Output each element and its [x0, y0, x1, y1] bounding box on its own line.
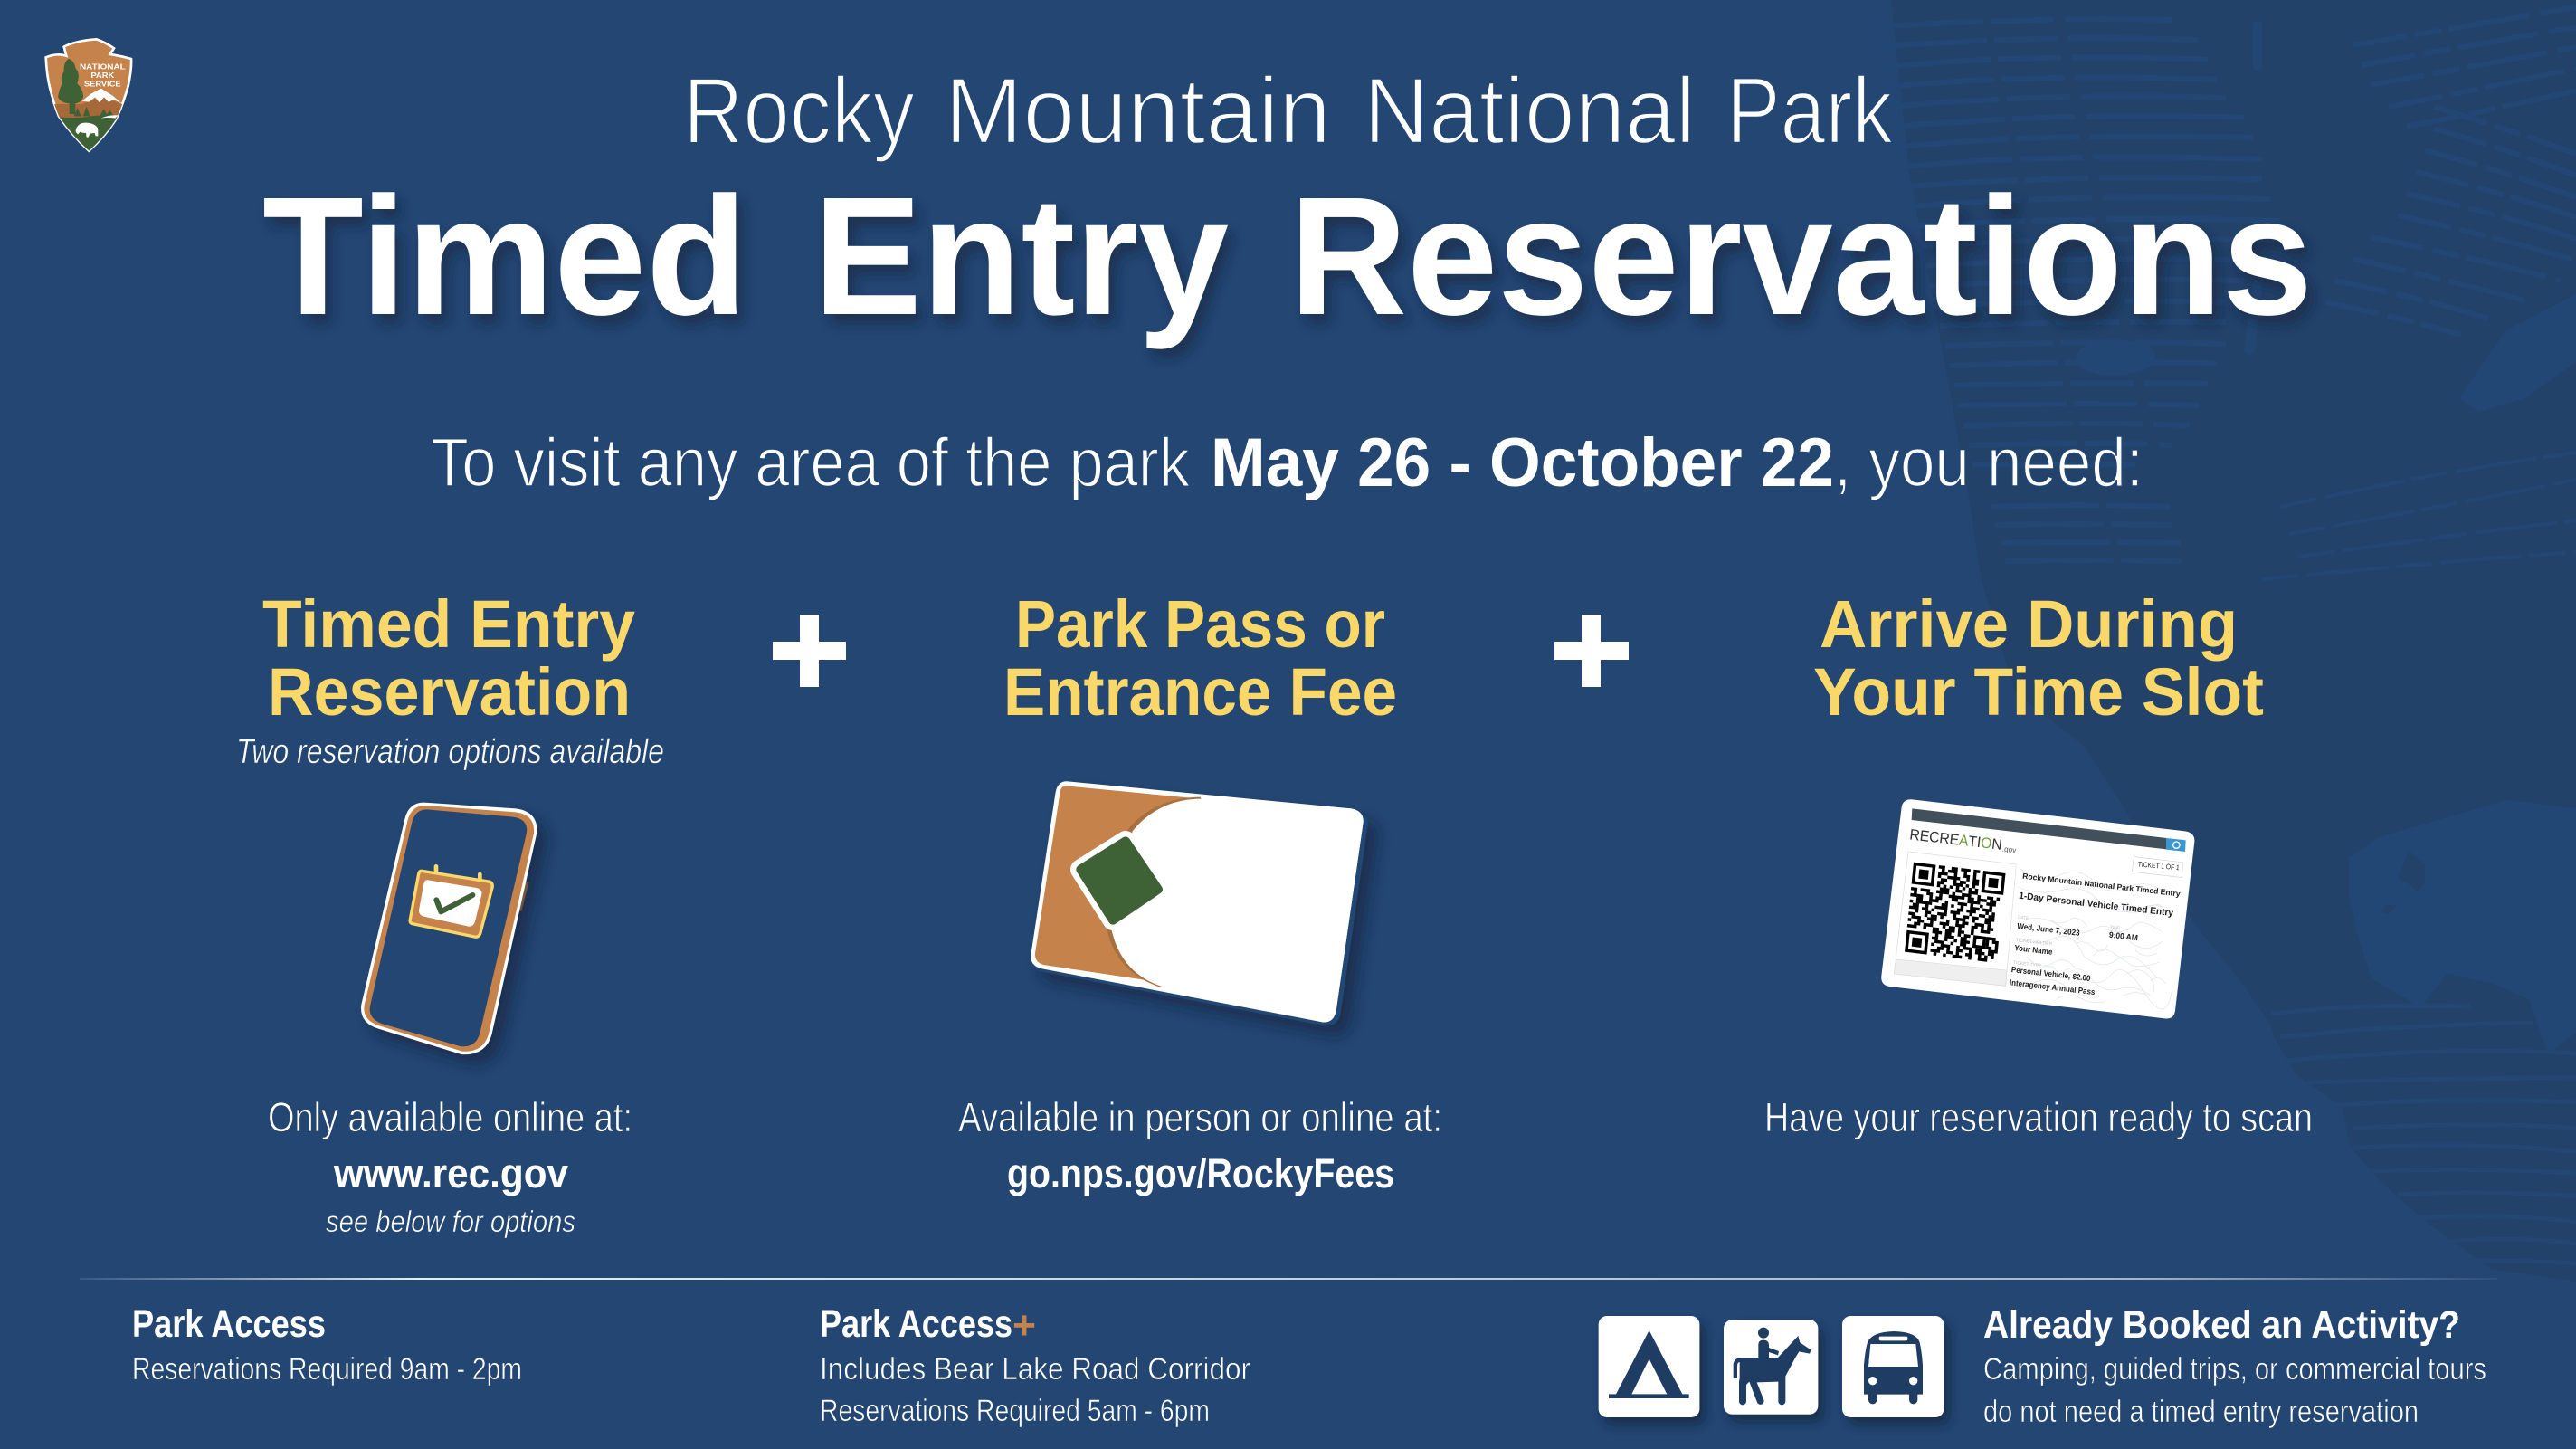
title: Timed Entry Reservations: Reservations: [1289, 163, 2313, 350]
text: two reservation options: Two reservation options available: [236, 733, 664, 771]
icon: recreation.gov ticket: Wed, June 7, 2023: [2017, 921, 2080, 938]
panel: park access plus: +: [1012, 1303, 1036, 1348]
icon: recreation.gov ticket: [1881, 799, 2194, 1018]
panel: timed entry reservation: [236, 586, 664, 1238]
panel: already booked an activity: [1983, 1303, 2486, 1429]
icon: recreation.gov ticket: TICKET TYPE: [2013, 960, 2042, 969]
text: available in person: Available in person or online at:: [958, 1094, 1442, 1140]
heading: Park Pass or Entrance Fee: Park Pass or: [1015, 586, 1385, 662]
panel: already booked an activity: Camping, guided trips, or commercial tours: [1983, 1352, 2486, 1387]
icon: recreation.gov ticket: Personal Vehicle, $2.00: [2010, 965, 2091, 983]
icon: recreation.gov ticket: TICKET HOLDER: [2015, 938, 2053, 948]
title: Timed Entry Reservations: Timed: [262, 163, 747, 350]
panel: park access: Park Access: [132, 1302, 326, 1346]
icon: recreation.gov ticket: 9:00 AM: [2108, 930, 2138, 942]
title: Timed Entry Reservations: [262, 163, 2313, 350]
logo: National Park Service arrowhead: [46, 39, 131, 157]
QR code: [1905, 863, 2005, 963]
panel: park access: Reservations Required 9am - 2pm: [132, 1352, 522, 1387]
heading: Timed Entry Reservation: Reservation: [268, 654, 631, 729]
icon: recreation.gov ticket: 1-Day Personal Vehicle Timed Entry: [2019, 891, 2174, 919]
icon: recreation.gov ticket: Rocky Mountain National Park Timed Entry: [2022, 872, 2181, 899]
panel: arrive during your time slot: [1764, 586, 2313, 1140]
panel: park access: [132, 1302, 522, 1387]
icon: phone with calendar check: [361, 803, 537, 1054]
text: have reservation ready: Have your reservation ready to scan: [1764, 1094, 2313, 1140]
icon: horseback rider: [1724, 1320, 1818, 1415]
icon: plus one: [773, 615, 846, 687]
title: Timed Entry Reservations: Entry: [813, 163, 1229, 350]
text: see below for options: see below for options: [326, 1205, 575, 1238]
heading: Timed Entry Reservation: [262, 586, 635, 729]
icon: plus two: [1554, 615, 1629, 687]
panel: park access plus: Park Access: [820, 1302, 1012, 1346]
text: only available online: Only available online at:: [268, 1094, 632, 1140]
subheading: date requirement: May 26 - October 22: [1211, 424, 1834, 501]
heading: Timed Entry Reservation: Timed Entry: [262, 586, 635, 662]
icon: recreation.gov ticket: TIME: [2109, 925, 2121, 931]
panel: park access plus: Includes Bear Lake Road Corridor: [820, 1352, 1250, 1387]
icon: bus: [1842, 1316, 1944, 1417]
panel: park pass or entrance fee: [958, 586, 1442, 1196]
heading: Arrive During Your Time Slot: Your Time Slot: [1813, 654, 2264, 729]
icon: recreation.gov ticket: Your Name: [2014, 943, 2053, 957]
icons: activities: [1599, 1316, 1944, 1417]
logo: National Park Service arrowhead: NATIONAL: [80, 62, 126, 71]
text: fees url: go.nps.gov/RockyFees: [1007, 1150, 1394, 1196]
title: park name: Mountain: [945, 59, 1331, 164]
icon: tent: [1599, 1316, 1699, 1417]
panel: park access plus: Reservations Required 5am - 6pm: [820, 1394, 1210, 1428]
icon: recreation.gov ticket: Interagency Annual Pass: [2009, 977, 2096, 996]
title: park name: [683, 59, 1894, 164]
logo: National Park Service arrowhead: PARK: [90, 71, 114, 80]
icon: recreation.gov ticket: DATE: [2018, 915, 2029, 921]
panel: already booked an activity: Already Booked an Activity?: [1983, 1303, 2460, 1347]
title: park name: Park: [1726, 59, 1894, 164]
title: park name: National: [1364, 59, 1696, 164]
subheading: date requirement: To visit any area of the park: [431, 424, 1191, 501]
icon: recreation.gov ticket: .gov: [2001, 844, 2017, 854]
subheading: date requirement: [431, 424, 2143, 501]
logo: National Park Service arrowhead: SERVICE: [84, 79, 121, 88]
panel: park access plus: [820, 1302, 1250, 1428]
title: park name: Rocky: [683, 59, 915, 164]
icon: park pass card: [1031, 781, 1368, 1025]
heading: Arrive During Your Time Slot: Arrive During: [1820, 586, 2238, 662]
heading: Park Pass or Entrance Fee: Entrance Fee: [1003, 654, 1397, 729]
background: bison silhouette texture: [1875, 0, 2576, 1282]
icon: recreation.gov ticket: TICKET 1 OF 1: [2137, 860, 2181, 872]
icon: recreation.gov ticket: RECREATION: [1909, 825, 2003, 853]
heading: Park Pass or Entrance Fee: [1003, 586, 1397, 729]
heading: Arrive During Your Time Slot: [1813, 586, 2264, 729]
subheading: date requirement: , you need:: [1834, 424, 2143, 501]
panel: already booked an activity: do not need a timed entry reservation: [1983, 1395, 2419, 1429]
text: rec.gov url: www.rec.gov: [333, 1150, 568, 1196]
